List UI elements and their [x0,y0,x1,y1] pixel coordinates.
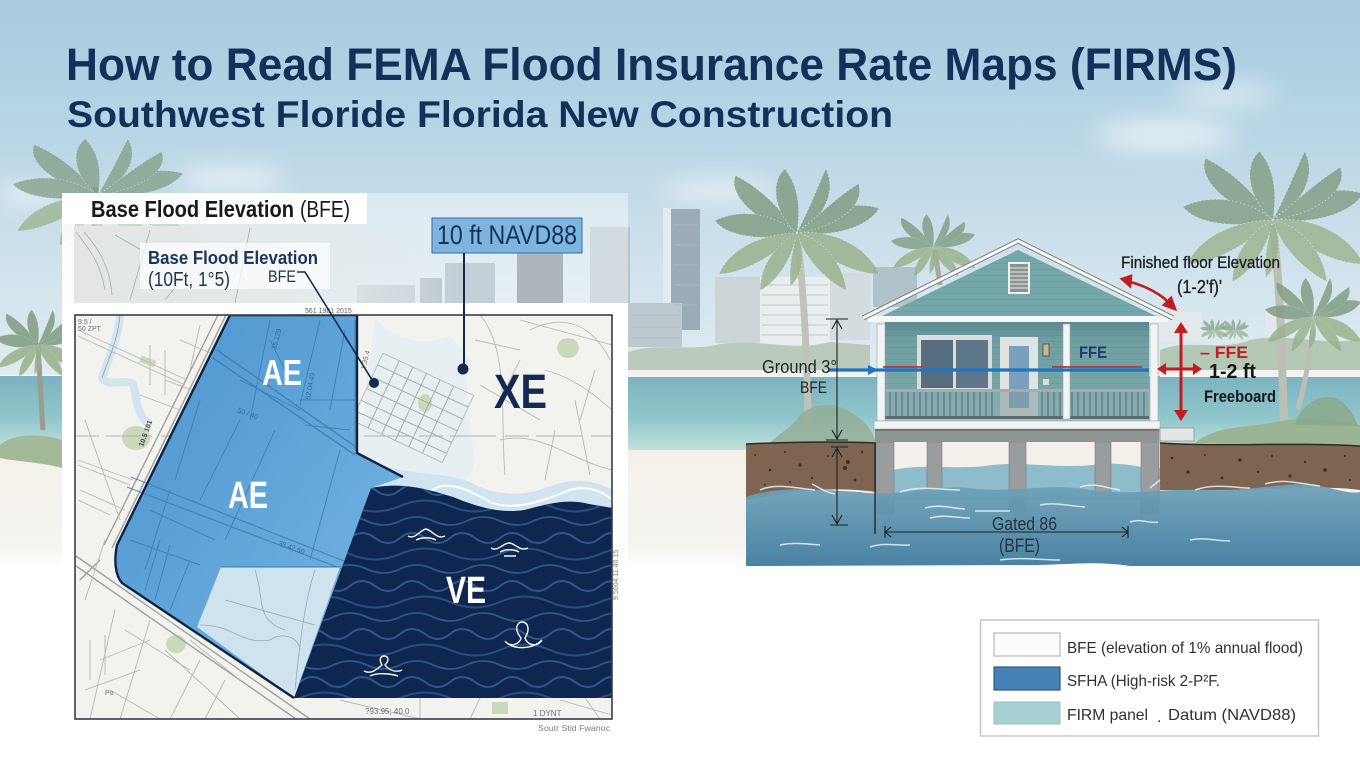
map zone labels [228,352,547,612]
heading chip: base flood elevation [62,193,367,224]
map zone labels: AE [262,352,302,393]
porch posts [877,324,1158,421]
map tiny labels: ?93.95; 40.0 [365,707,410,716]
map tiny labels: 35.42.50 [277,540,305,556]
gable siding [882,250,1156,316]
map tiny labels: 52.04.40 [305,372,317,400]
background: sky [0,0,1360,375]
background: city skyline [357,208,1283,347]
map parks [122,338,579,714]
roof trim [863,241,1173,322]
arrows: freeboard cross [1157,322,1202,421]
map tiny labels: 1 35.4 [360,350,372,371]
window [917,335,992,390]
map tiny labels: 35.129 [271,328,284,351]
legend [980,620,1318,736]
map tiny labels [78,319,562,718]
dimension label: ground: Ground 3° [762,357,837,377]
map tiny labels: 50 / 40 [236,407,259,421]
background: left palm trees [0,139,183,468]
map edge captions: 561 1981 2015 [305,308,352,315]
heading chip: base flood elevation: Base Flood Elevation [91,196,294,222]
zone light shaded X area [197,567,340,698]
panel: flood map card [62,193,1168,731]
map zone labels: AE [228,475,268,517]
porch wall [885,322,1149,392]
flood water [746,484,1360,566]
legend item: FIRM panel: . [1157,709,1161,726]
soil left and right [746,442,1360,500]
arrow: BFE blue level [828,365,1149,375]
panel: elevated house cross-section [746,241,1360,566]
zone AE interior roads [127,320,356,610]
label: finished floor elevation: (1-2'f)' [1177,277,1222,297]
map edge captions: Soutr Stid Fwanoc [538,724,610,733]
title: How to Read FEMA Flood Insurance Rate Maps (FIRMS) [66,39,1237,90]
background: center palm trees [715,169,975,443]
flood zone map [75,315,615,719]
dimension label: gated BFE [992,514,1057,557]
icons: wave marks [364,529,542,676]
legend item: FIRM panel: FIRM panel [1067,707,1148,724]
deck and floor beam [874,421,1160,442]
label: base flood elevation inner callout: BFE [268,267,296,286]
legend item: SFHA [994,667,1220,690]
zone AE polygon [115,315,403,698]
porch lamp [1043,344,1049,385]
arrow: curved roof [1122,276,1175,309]
background: clouds [0,85,1275,205]
label: base flood elevation inner callout [140,243,330,291]
dimension label: ground [762,357,837,397]
map edge captions [305,308,620,733]
door [1000,337,1038,417]
background: distant shoreline [628,338,1360,377]
map tiny labels: 9.5 / [78,319,92,326]
map zone labels: XE [494,366,547,419]
line: FFE red level [883,366,1142,368]
zone VE coastal water [290,480,615,700]
map water: creeks and coast [102,315,613,511]
label: base flood elevation inner callout: (10Ft, 1°5) [148,269,230,291]
background: sea [0,376,1360,452]
legend item: BFE [994,633,1303,657]
water foam [760,480,1320,560]
piers [876,442,1159,514]
house [863,241,1194,442]
legend item: SFHA: SFHA (High-risk 2-P²F. [1067,673,1220,690]
zone AE outline [115,315,403,698]
dimension label: gated BFE: (BFE) [999,536,1040,557]
legend item: FIRM panel: Datum (NAVD88) [1168,707,1296,724]
gable vent [1008,262,1030,294]
heading chip: base flood elevation: (BFE) [300,196,350,222]
dimension label: gated BFE: Gated 86 [992,514,1057,534]
map tiny labels: Po [105,690,114,697]
leader line: BFE to map point [297,272,379,388]
label: FFE freeboard: – FFE [1200,343,1248,362]
callout: 10 ft NAVD88: 10 ft NAVD88 [437,220,577,250]
callout: 10 ft NAVD88 [432,218,582,374]
label: finished floor elevation: Finished floor Elevation [1121,253,1280,272]
subtitle: Southwest Floride Florida New Construction [67,94,893,135]
stair stub [1160,428,1194,441]
back water between piers [885,464,1160,500]
dimension label: ground: BFE [800,378,827,397]
dimension arrows [826,319,1128,538]
legend item: FIRM panel [994,702,1296,726]
background: sand [0,450,1360,566]
background: right palm trees [1183,151,1360,445]
legend item: BFE: BFE (elevation of 1% annual flood) [1067,640,1303,657]
label: base flood elevation inner callout: Base Flood Elevation [148,248,318,268]
map zone labels: VE [446,570,486,612]
label: FFE freeboard: Freeboard [1204,387,1276,406]
map roads [75,315,612,719]
railing [885,389,1149,419]
label: FFE freeboard: 1-2 ft [1209,361,1256,383]
map edge captions: 9.5004.11 40.15 [613,550,620,600]
map tiny labels: 10.5 101 [138,420,154,448]
FFE label in house: FFE [1079,343,1107,362]
panel: translucent header backing [62,193,628,303]
map tiny labels: 1 DYNT [533,709,562,718]
sand between piers [876,442,1160,472]
label: finished floor elevation [1121,253,1280,297]
map tiny labels: 50 ZPT [78,326,102,333]
label: FFE freeboard [1200,343,1276,406]
